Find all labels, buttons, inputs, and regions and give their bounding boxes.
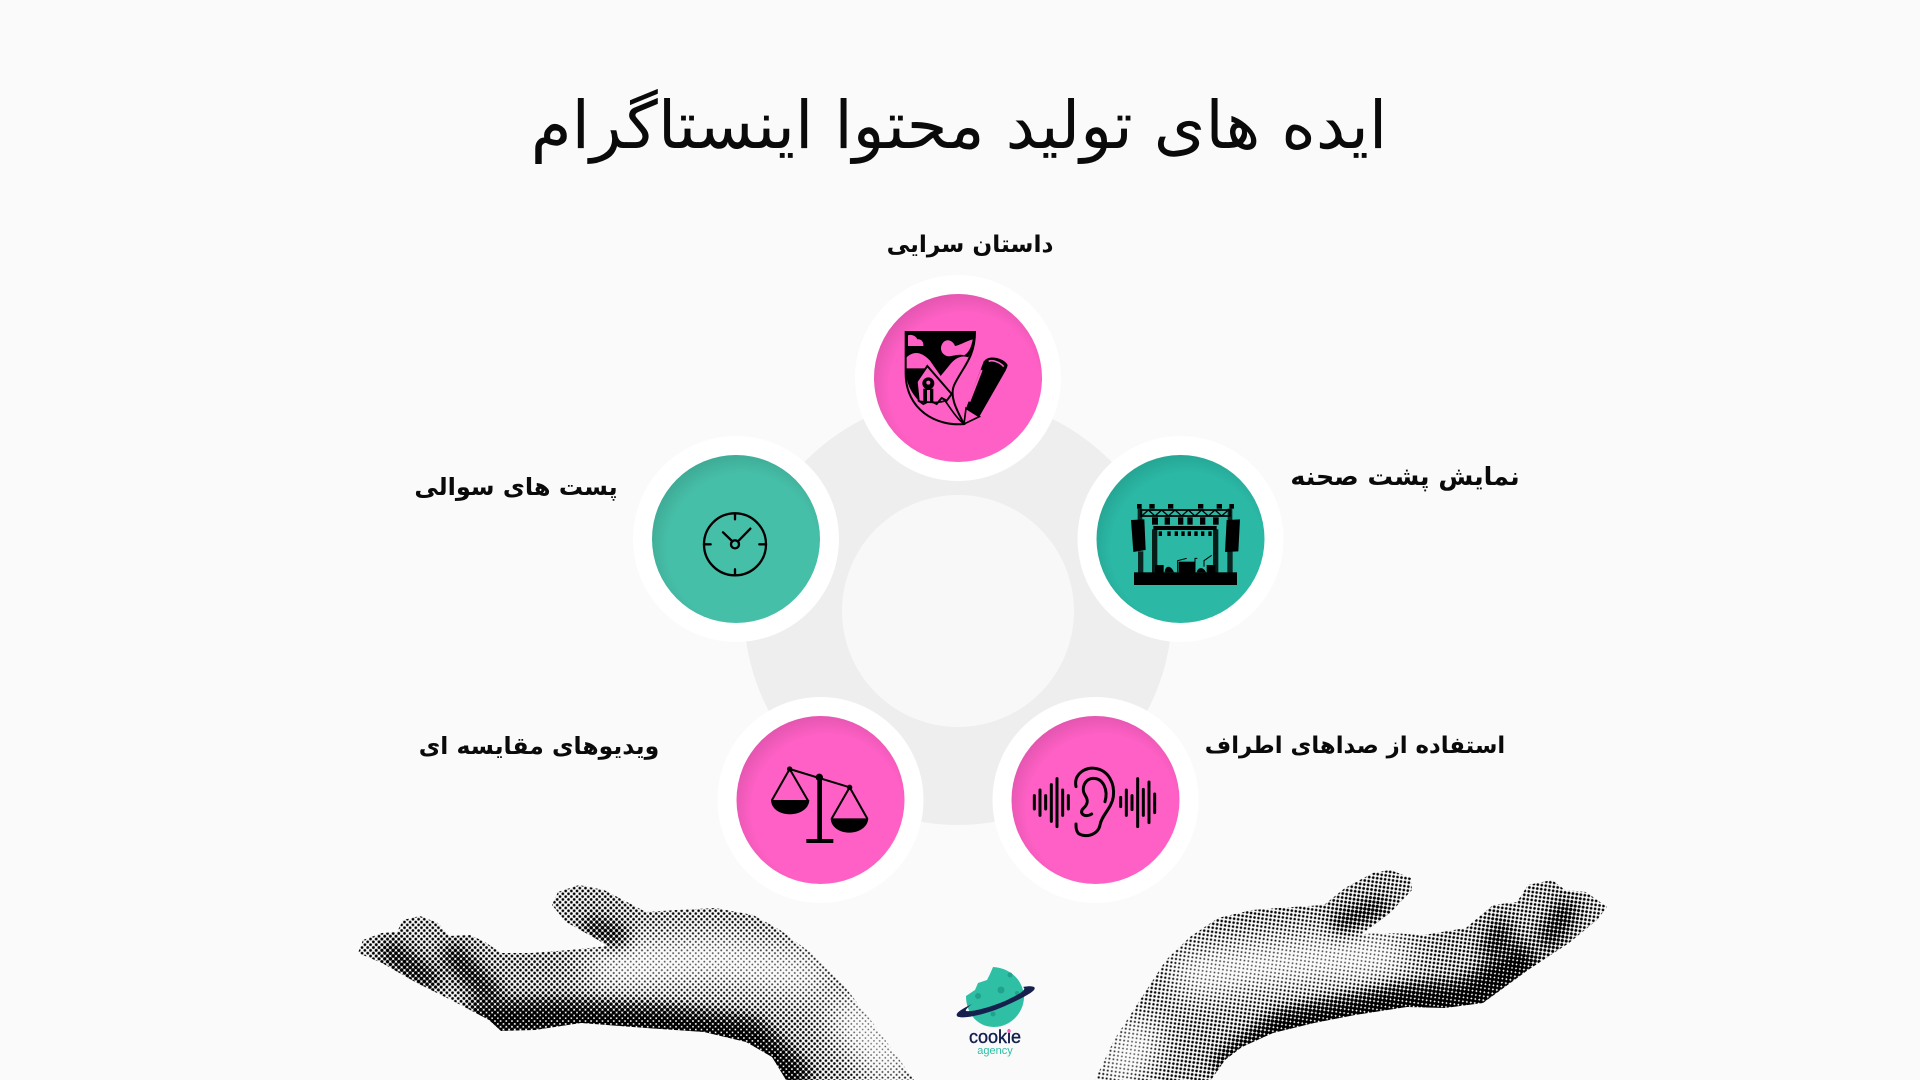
label: behind the scenes: نمایش پشت صحنه — [1290, 462, 1520, 491]
node: question posts — [633, 436, 839, 642]
node: comparison videos — [718, 697, 924, 903]
icon: concert stage — [1131, 504, 1240, 585]
icon: ear with sound waves — [1034, 768, 1155, 836]
ring: central gray donut — [744, 397, 1172, 825]
logo dot — [1007, 1029, 1011, 1033]
icon: balance scales — [771, 766, 868, 843]
label: ambient sounds: استفاده از صداهای اطراف — [1205, 733, 1505, 759]
halftone left hand — [358, 885, 914, 1080]
logo planet — [966, 967, 1024, 1027]
label: question posts: پست های سوالی — [414, 473, 618, 501]
title: ایده های تولید محتوا اینستاگرام — [531, 87, 1387, 164]
label: storytelling: داستان سرایی — [887, 231, 1053, 258]
logo subtitle: agency — [977, 1045, 1013, 1057]
logo ring — [957, 986, 1035, 1017]
icon: story map and pencil — [906, 332, 1008, 424]
node: behind the scenes — [1078, 436, 1284, 642]
node: storytelling — [855, 275, 1061, 481]
icon: clock — [704, 513, 766, 575]
halftone right hand — [1090, 860, 1620, 1080]
logo wordmark: cookie — [969, 1027, 1021, 1047]
label: comparison videos: ویدیوهای مقایسه ای — [419, 732, 659, 760]
logo: cookie agency — [957, 967, 1035, 1057]
node: ambient sounds — [992, 697, 1198, 903]
